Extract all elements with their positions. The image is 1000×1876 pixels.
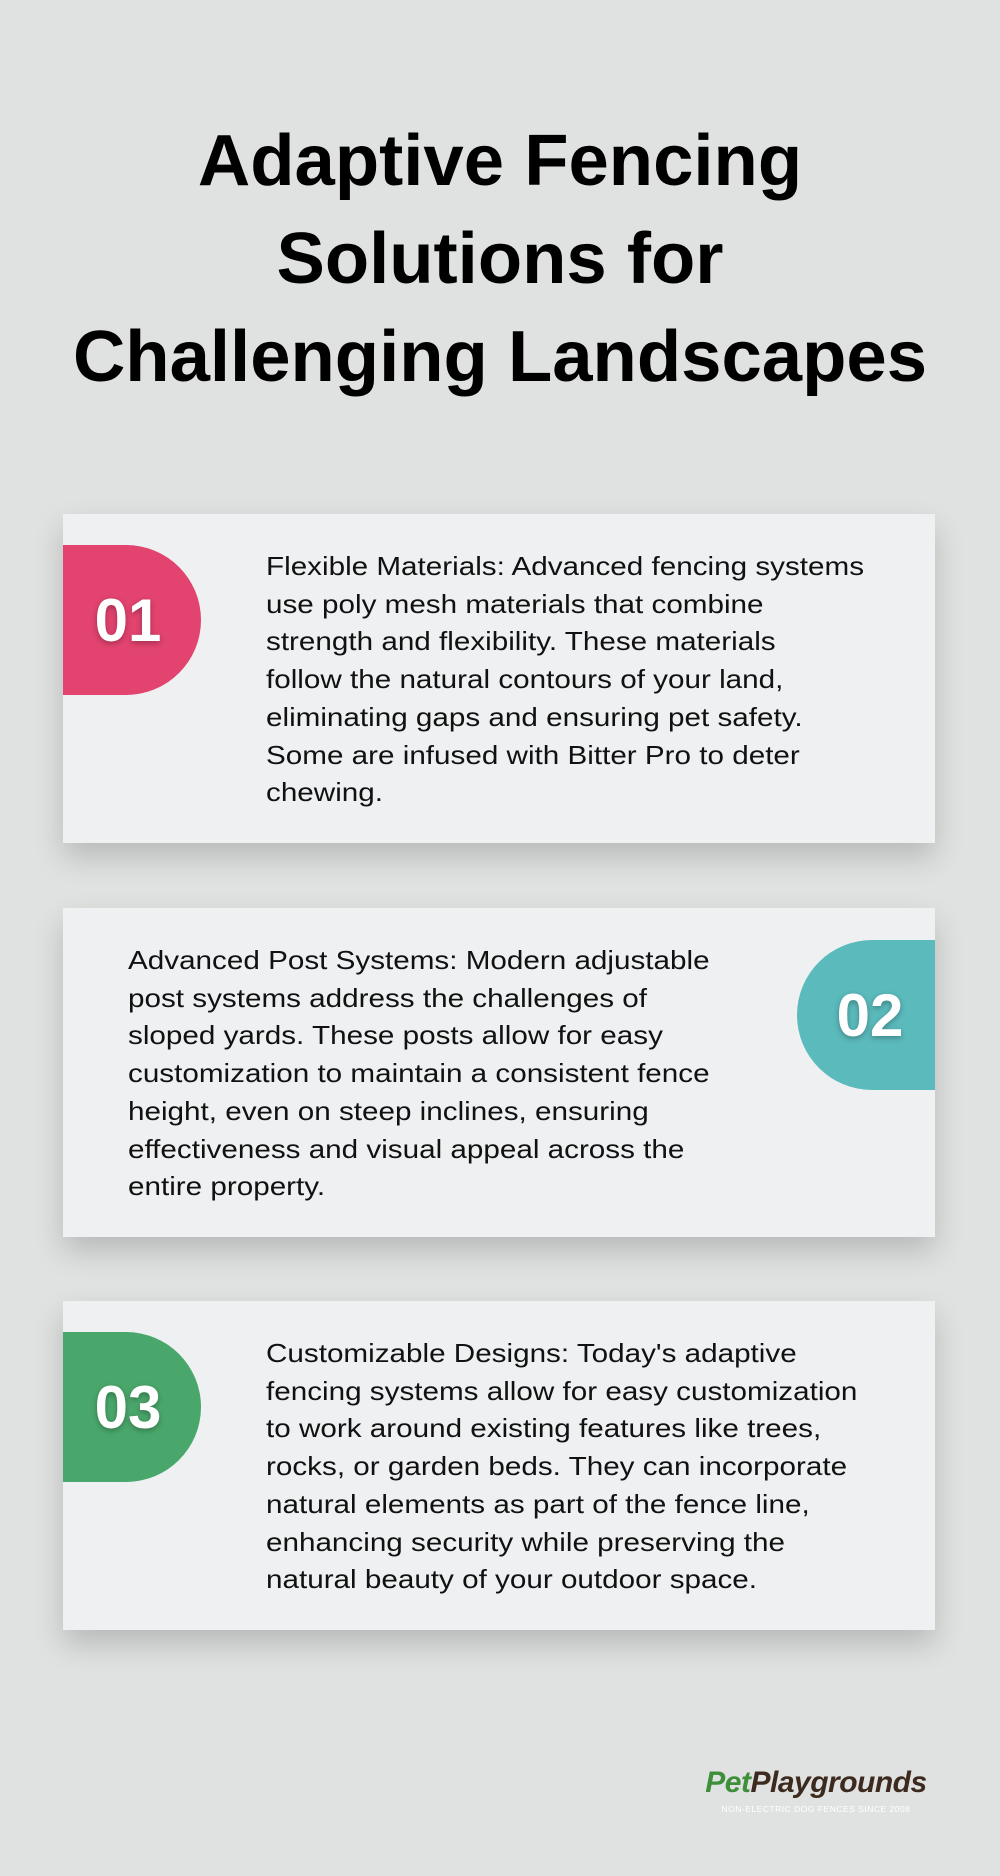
badge 03 (63, 1332, 201, 1482)
badge 02: 02 (837, 982, 903, 1048)
panel: advanced post systems (63, 908, 935, 1237)
text: advanced post systems: Advanced Post Systems: Modern adjustable (128, 945, 710, 975)
text: advanced post systems: entire property. (128, 1171, 325, 1201)
logo: NON-ELECTRIC DOG FENCES SINCE 2008 (722, 1804, 910, 1814)
text: advanced post systems (128, 945, 710, 1201)
logo: PetPlaygrounds (705, 1766, 927, 1799)
badge 02 (797, 940, 935, 1090)
badge 01: 01 (95, 586, 161, 654)
text: flexible materials: use poly mesh materials that combine (266, 589, 764, 619)
title: Challenging Landscapes (73, 316, 927, 397)
badge 03: 03 (95, 1374, 161, 1440)
title (73, 120, 927, 397)
text: advanced post systems: height, even on steep inclines, ensuring (128, 1096, 649, 1126)
text: customizable designs: enhancing security while preserving the (266, 1527, 785, 1557)
text: customizable designs: rocks, or garden beds. They can incorporate (266, 1451, 847, 1481)
text: flexible materials: eliminating gaps and ensuring pet safety. (266, 702, 803, 732)
text: flexible materials: Flexible Materials: Advanced fencing systems (266, 551, 864, 581)
text: customizable designs: to work around existing features like trees, (266, 1413, 821, 1443)
text: flexible materials: chewing. (266, 777, 383, 807)
text: advanced post systems: effectiveness and visual appeal across the (128, 1134, 684, 1164)
badge 01 (63, 545, 201, 695)
text: customizable designs: natural elements as part of the fence line, (266, 1489, 810, 1519)
panel: customizable designs (63, 1301, 935, 1630)
title: Solutions for (276, 218, 724, 299)
text: customizable designs: natural beauty of your outdoor space. (266, 1564, 757, 1594)
panel: flexible materials (63, 514, 935, 843)
text: customizable designs (266, 1338, 857, 1594)
text: advanced post systems: customization to maintain a consistent fence (128, 1058, 710, 1088)
text: flexible materials: follow the natural contours of your land, (266, 664, 783, 694)
logo (705, 1766, 927, 1814)
text: flexible materials: strength and flexibility. These materials (266, 626, 776, 656)
text: advanced post systems: post systems address the challenges of (128, 983, 647, 1013)
text: customizable designs: Customizable Designs: Today's adaptive (266, 1338, 797, 1368)
title: Adaptive Fencing (198, 120, 802, 201)
text: customizable designs: fencing systems allow for easy customization (266, 1376, 857, 1406)
text: advanced post systems: sloped yards. These posts allow for easy (128, 1020, 663, 1050)
text: flexible materials: Some are infused with Bitter Pro to deter (266, 740, 800, 770)
text: flexible materials (266, 551, 864, 807)
